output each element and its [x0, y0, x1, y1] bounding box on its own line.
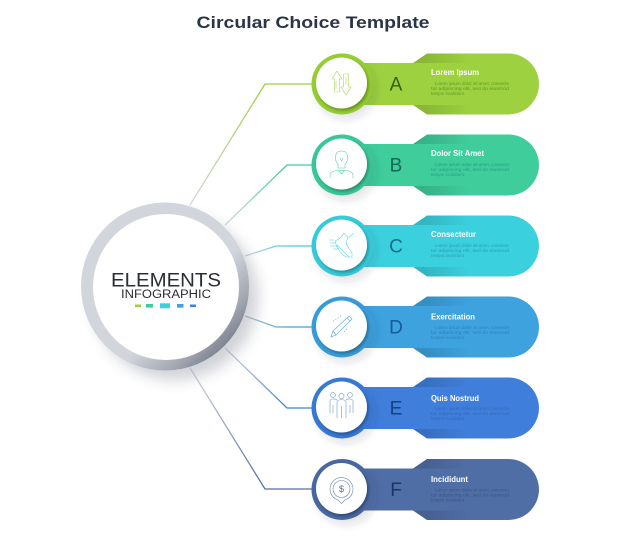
letter A: A: [390, 74, 403, 96]
body B: tempor incididunt.: [431, 172, 465, 178]
connector lines: [190, 84, 314, 489]
heading D: Exercitation: [431, 312, 475, 322]
body F: [431, 488, 509, 504]
body A: Lorem ipsum dolor sit amet, consecte: [435, 81, 509, 87]
heading A: Lorem Ipsum: [431, 68, 479, 77]
body E: [431, 406, 509, 422]
heading B: Dolor Sit Amet: [431, 149, 484, 158]
letter C: C: [389, 236, 403, 258]
body D: tur adipiscing elit, sed do eiusmod: [431, 330, 509, 336]
connector E: [225, 348, 314, 408]
body E: tempor incididunt.: [431, 416, 465, 422]
central circle: [81, 202, 258, 380]
body D: [431, 325, 509, 341]
body B: [431, 162, 509, 178]
heading F: Incididunt: [431, 475, 468, 484]
letter B: B: [390, 156, 402, 176]
body C: Lorem ipsum dolor sit amet, consecte: [435, 243, 509, 249]
body D: Lorem ipsum dolor sit amet, consecte: [435, 325, 509, 331]
icon: pencil: [316, 300, 367, 352]
connector C: [245, 246, 314, 256]
icon: dollar coin: $: [339, 484, 344, 494]
icon: dollar coin: [316, 463, 367, 514]
body A: [431, 81, 509, 97]
letter E: E: [390, 398, 402, 420]
body B: tur adipiscing elit, sed do eiusmod: [431, 167, 509, 173]
connector F: [190, 368, 314, 489]
body E: Lorem ipsum dolor sit amet, consecte: [435, 406, 509, 412]
heading E: Quis Nostrud: [431, 394, 479, 403]
body C: tempor incididunt.: [431, 253, 465, 259]
connector B: [225, 165, 314, 225]
color dashes: [135, 303, 196, 308]
body E: tur adipiscing elit, sed do eiusmod: [431, 411, 509, 417]
body F: Lorem ipsum dolor sit amet, consecte: [435, 488, 509, 494]
icon: group of people: [316, 382, 367, 432]
body C: tur adipiscing elit, sed do eiusmod: [431, 248, 509, 254]
connector D: [245, 316, 314, 327]
body D: tempor incididunt.: [431, 335, 465, 341]
letter F: F: [390, 480, 402, 501]
body F: tempor incididunt.: [431, 498, 465, 504]
option C: [312, 216, 539, 276]
connector A: [190, 84, 314, 205]
body B: Lorem ipsum dolor sit amet, consecte: [435, 162, 509, 168]
body A: tur adipiscing elit, sed do eiusmod: [431, 86, 509, 92]
icon: up and down arrows: [316, 58, 367, 108]
body F: tur adipiscing elit, sed do eiusmod: [431, 492, 509, 498]
center heading: ELEMENTS: [111, 270, 221, 292]
letter D: D: [389, 318, 403, 338]
icon: person with light bulb: [316, 138, 367, 190]
title: Circular Choice Template: [196, 13, 430, 32]
option B: [312, 134, 539, 196]
heading C: Consectetur: [431, 230, 476, 239]
option A: [312, 54, 539, 114]
icon: running shoe: [316, 220, 367, 270]
center subheading: INFOGRAPHIC: [121, 289, 211, 301]
body A: tempor incididunt.: [431, 91, 465, 97]
body C: [431, 243, 509, 259]
option F: [312, 459, 539, 520]
option E: [312, 378, 539, 438]
option D: [312, 296, 539, 358]
